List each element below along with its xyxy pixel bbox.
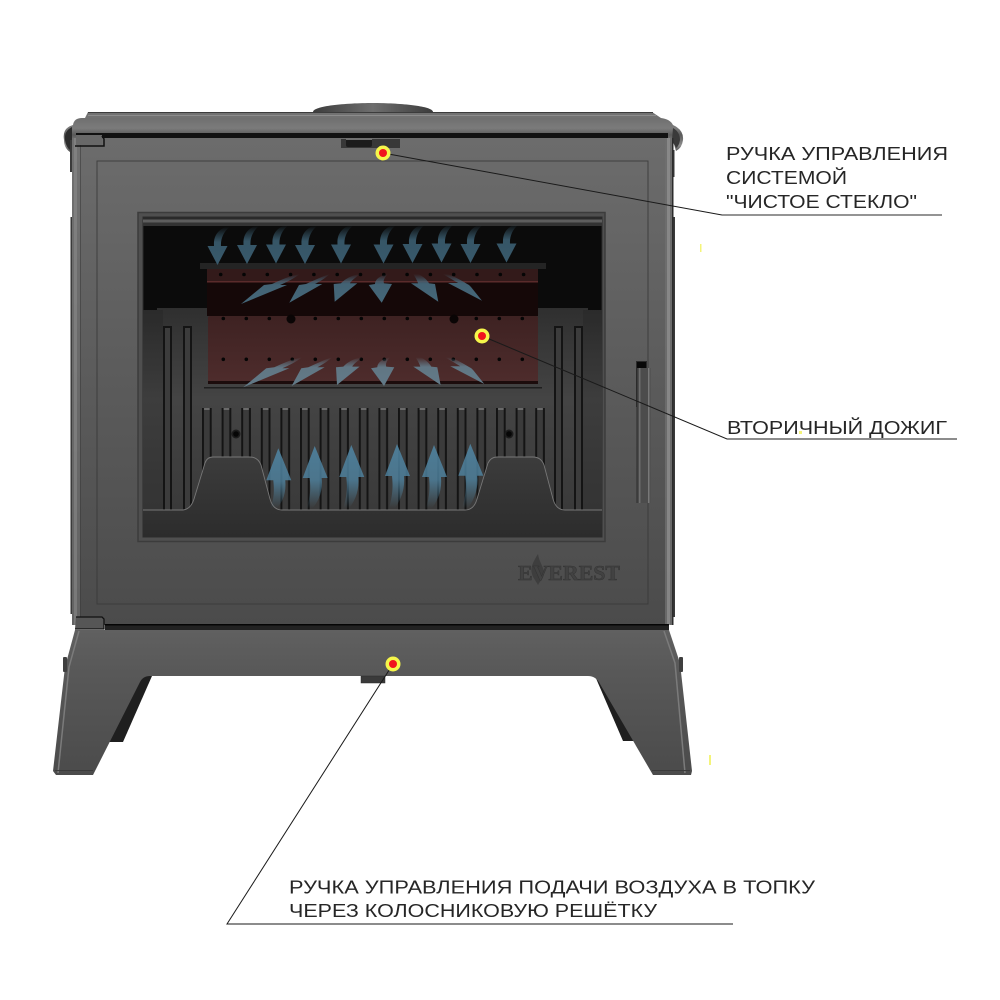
bottom seam	[75, 617, 669, 631]
label: clean glass handle: "ЧИСТОЕ СТЕКЛО"	[726, 192, 917, 212]
marker: clean glass handle	[376, 146, 390, 160]
refractory bricks	[200, 263, 546, 388]
label: clean glass handle: РУЧКА УПРАВЛЕНИЯ	[726, 144, 948, 164]
label: clean glass handle: СИСТЕМОЙ	[726, 167, 847, 188]
side edges	[70, 140, 675, 617]
label: clean glass handle	[726, 144, 948, 212]
callout line: secondary burn	[482, 336, 957, 439]
stove door body	[72, 138, 674, 625]
top control handle	[341, 138, 400, 148]
flue collar	[313, 103, 433, 112]
arrows: downward top row	[208, 224, 518, 265]
marker: air supply handle	[386, 656, 400, 672]
base with legs	[53, 630, 692, 775]
arrows: upward from grate	[266, 444, 483, 508]
yellow specks	[700, 244, 802, 765]
logo: EVEREST: EVEREST	[518, 561, 620, 585]
bottom air handle	[361, 676, 385, 683]
callout line: clean glass handle	[383, 153, 722, 215]
label: air supply handle	[289, 878, 816, 921]
stove top plate and rim	[64, 112, 683, 152]
window frame	[138, 212, 605, 542]
marker: secondary burn	[474, 328, 490, 344]
ash lip	[143, 457, 602, 537]
arrows: spreading upper row	[241, 274, 482, 304]
label: secondary burn: ВТОРИЧНЫЙ ДОЖИГ	[727, 417, 947, 438]
label: air supply handle: РУЧКА УПРАВЛЕНИЯ ПОДАЧИ ВОЗДУХА В ТОПКУ	[289, 878, 816, 898]
callout line: air supply handle	[227, 664, 733, 924]
firebox	[143, 217, 602, 537]
label: air supply handle: ЧЕРЕЗ КОЛОСНИКОВУЮ РЕШЁТКУ	[289, 901, 658, 921]
hinge: top	[75, 135, 104, 146]
callout rule: clean glass handle	[722, 214, 942, 216]
arrows: spreading lower row	[243, 357, 484, 387]
door handle	[636, 361, 650, 503]
rear legs	[109, 676, 634, 742]
